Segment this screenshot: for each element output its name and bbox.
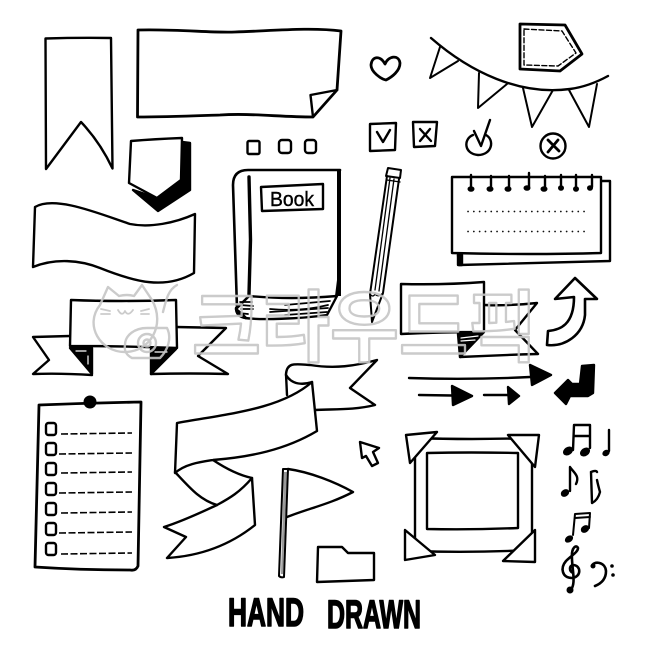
- medium arrow: [419, 386, 472, 405]
- bookmark banner: [46, 38, 112, 169]
- ribbon front band: [175, 382, 317, 473]
- book label: Book: [270, 189, 315, 211]
- title: DRAWN: [327, 593, 421, 637]
- long arrow: [409, 365, 551, 385]
- photo frame with corners: [405, 432, 539, 562]
- bunting garland: [430, 38, 608, 127]
- large note with folded corner: [138, 29, 341, 117]
- checkbox with check: [370, 123, 396, 151]
- treble clef: [563, 546, 579, 594]
- eighth note: [559, 467, 577, 498]
- pin: [84, 396, 96, 408]
- watermark wordmark: 크라우드픽: [192, 284, 537, 372]
- checkboxes: [46, 423, 56, 555]
- pennant flag: [279, 469, 353, 577]
- music notes: [559, 425, 615, 594]
- watermark: [94, 284, 537, 372]
- curved up arrow: [547, 278, 597, 345]
- second beamed notes: [563, 513, 591, 544]
- shield badge with shadow: [129, 138, 190, 211]
- left folded ribbon: [33, 300, 228, 375]
- book label: [261, 184, 323, 211]
- circled cross mark: [540, 134, 566, 158]
- quarter note: [601, 430, 611, 457]
- dashed lines: [59, 433, 132, 554]
- ribbon middle fold: [175, 460, 252, 505]
- sixteenth note: [591, 471, 600, 503]
- spiral notepad: [452, 173, 610, 265]
- checkbox with cross: [413, 122, 437, 147]
- watermark cat logo: [94, 285, 177, 358]
- bass clef: [590, 563, 615, 586]
- book: [233, 170, 341, 319]
- book cover: [233, 170, 340, 308]
- stitched tag: [520, 24, 582, 71]
- cursor arrow: [360, 442, 379, 466]
- circled check mark: [466, 120, 491, 155]
- right folded ribbon: [401, 282, 538, 357]
- small squares row: [248, 140, 316, 154]
- wavy banner: [33, 203, 195, 283]
- bold bent arrow: [555, 365, 594, 404]
- title: HAND: [228, 591, 304, 635]
- checklist note: [35, 396, 141, 570]
- title: [228, 591, 421, 637]
- heart: [371, 57, 400, 80]
- ribbon back tail: [286, 360, 377, 410]
- short arrow: [484, 387, 519, 404]
- ribbon lower tail: [164, 478, 255, 558]
- notepad rings: [468, 173, 593, 192]
- book pages: [236, 296, 337, 319]
- main curled ribbon: [164, 360, 377, 558]
- notepad dotted lines: [468, 212, 587, 232]
- beamed notes: [561, 425, 592, 458]
- pencil: [370, 168, 401, 322]
- folder: [317, 547, 374, 582]
